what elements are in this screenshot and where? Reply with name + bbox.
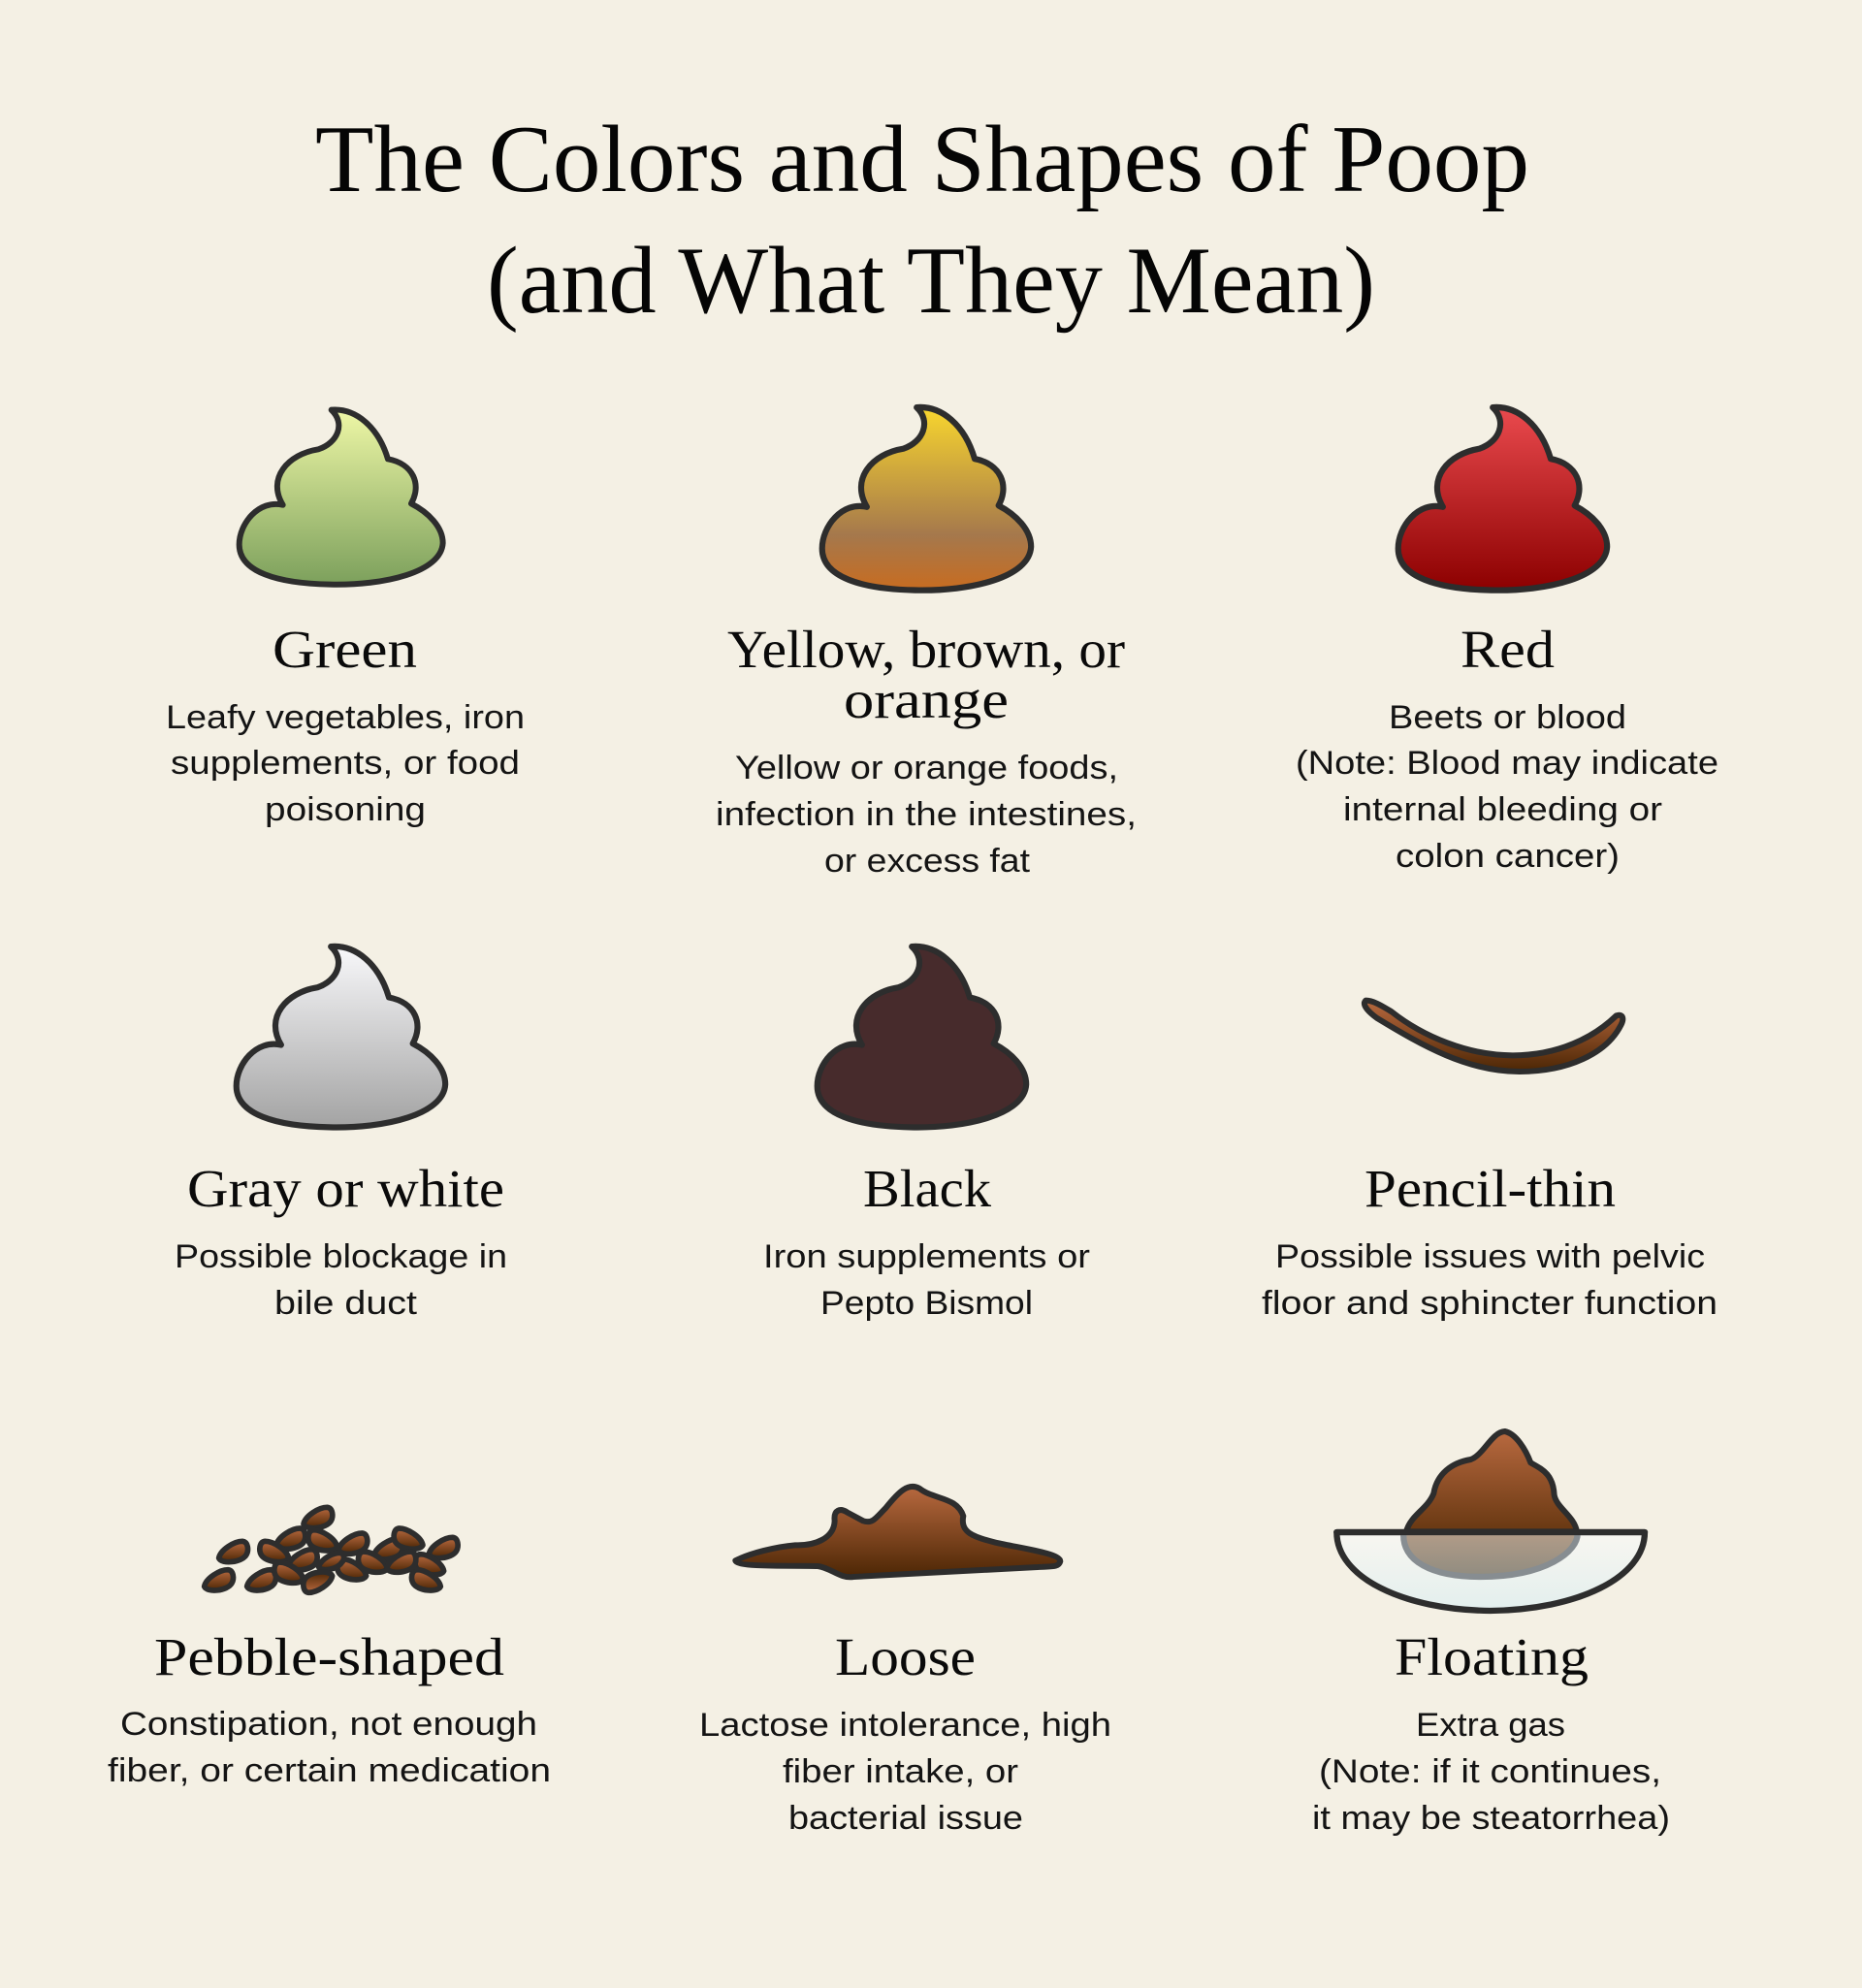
heading: yellow, brown, or orange: orange: [844, 670, 1009, 729]
panel: floating: [1312, 1431, 1670, 1837]
icon: black swirl: [818, 946, 1026, 1127]
description: yellow, brown, or orange: [716, 750, 1137, 880]
icon: pebbles: [205, 1507, 458, 1592]
heading: yellow, brown, or orange: Yellow, brown, or: [727, 620, 1125, 679]
panel: pencil-thin: [1262, 1001, 1718, 1322]
description: pencil-thin: floor and sphincter function: [1262, 1285, 1718, 1322]
description: pebble-shaped: fiber, or certain medication: [108, 1752, 551, 1789]
heading: yellow, brown, or orange: [727, 620, 1125, 729]
heading: gray or white: Gray or white: [187, 1159, 504, 1218]
description: pebble-shaped: [108, 1706, 551, 1789]
description: floating: (Note: if it continues,: [1319, 1753, 1661, 1790]
title: The Colors and Shapes of Poop: [315, 107, 1529, 212]
heading: pebble-shaped: Pebble-shaped: [154, 1627, 504, 1686]
panel: green: [166, 410, 525, 828]
description: gray or white: [175, 1238, 507, 1322]
description: red: internal bleeding or: [1343, 791, 1662, 828]
description: yellow, brown, or orange: or excess fat: [824, 843, 1031, 880]
description: pencil-thin: [1262, 1238, 1718, 1322]
description: yellow, brown, or orange: infection in the intestines,: [716, 796, 1137, 833]
icon: pencil-thin stool: [1364, 1001, 1622, 1072]
panel: pebble-shaped: [108, 1507, 551, 1789]
heading: pencil-thin: Pencil-thin: [1364, 1159, 1616, 1218]
description: gray or white: Possible blockage in: [175, 1238, 507, 1275]
description: loose: Lactose intolerance, high: [699, 1707, 1111, 1744]
description: pencil-thin: Possible issues with pelvic: [1275, 1238, 1705, 1275]
description: green: poisoning: [265, 791, 426, 828]
icon: gray swirl: [237, 946, 445, 1127]
description: black: Pepto Bismol: [820, 1285, 1033, 1322]
description: black: Iron supplements or: [763, 1238, 1090, 1275]
icon: green swirl: [240, 410, 443, 585]
heading: green: Green: [273, 620, 417, 679]
description: green: [166, 699, 525, 828]
description: loose: fiber intake, or: [783, 1753, 1018, 1790]
description: red: Beets or blood: [1389, 699, 1626, 736]
panel: gray or white: [175, 946, 507, 1322]
title: [315, 107, 1529, 334]
icon: loose stool: [735, 1487, 1060, 1577]
title: (and What They Mean): [487, 228, 1375, 334]
heading: loose: Loose: [835, 1627, 976, 1686]
description: red: (Note: Blood may indicate: [1296, 745, 1718, 782]
description: green: supplements, or food: [171, 745, 520, 782]
description: red: colon cancer): [1396, 838, 1620, 875]
description: green: Leafy vegetables, iron: [166, 699, 525, 736]
description: loose: [699, 1707, 1111, 1837]
panel: red: [1296, 407, 1718, 875]
description: floating: Extra gas: [1416, 1707, 1565, 1744]
description: yellow, brown, or orange: Yellow or orange foods,: [735, 750, 1118, 786]
panel: loose: [699, 1487, 1111, 1837]
heading: floating: Floating: [1395, 1627, 1589, 1686]
icon: red swirl: [1398, 407, 1607, 591]
description: pebble-shaped: Constipation, not enough: [120, 1706, 537, 1743]
icon: floating stool in bowl: [1336, 1431, 1645, 1611]
description: black: [763, 1238, 1090, 1322]
icon: yellow-brown swirl: [822, 407, 1031, 591]
panel: black: [763, 946, 1090, 1322]
description: loose: bacterial issue: [788, 1800, 1023, 1837]
panel: yellow, brown, or orange: [716, 407, 1137, 880]
description: floating: [1312, 1707, 1670, 1837]
description: red: [1296, 699, 1718, 875]
heading: red: Red: [1461, 620, 1555, 679]
description: gray or white: bile duct: [274, 1285, 418, 1322]
heading: black: Black: [863, 1159, 992, 1218]
description: floating: it may be steatorrhea): [1312, 1800, 1670, 1837]
